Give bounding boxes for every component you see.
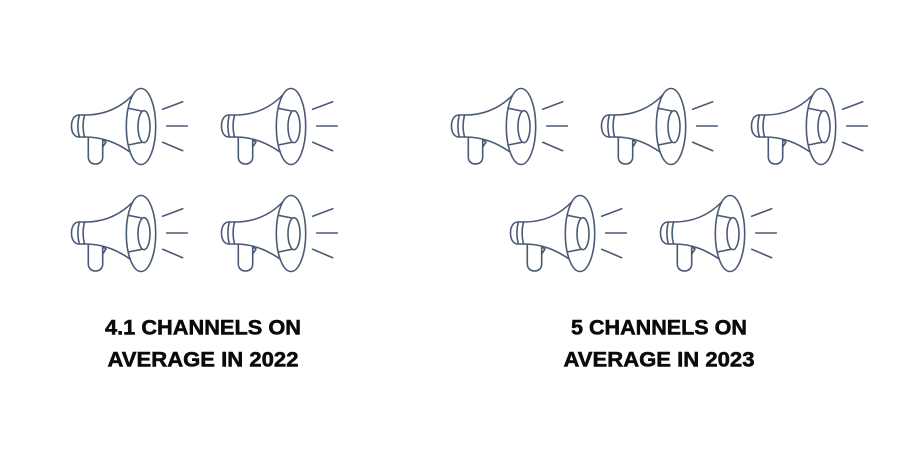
- icon: megaphone 1: [452, 88, 567, 164]
- icon: megaphone 2: [602, 88, 717, 164]
- icon: megaphone 3: [752, 88, 867, 164]
- caption: 2022: 4.1 CHANNELS ON: [105, 316, 301, 340]
- icon: megaphone 4: [510, 196, 626, 272]
- caption: 2023: 5 CHANNELS ON: [571, 316, 747, 340]
- icon: megaphone 1: [72, 88, 187, 164]
- panel: 2022 channels: [72, 88, 337, 372]
- icon: megaphone 4: [222, 196, 337, 272]
- caption: 2022: AVERAGE IN 2022: [108, 348, 299, 372]
- icon: megaphone 5: [660, 196, 776, 272]
- caption: 2023: AVERAGE IN 2023: [564, 348, 755, 372]
- icon: megaphone 2: [222, 88, 337, 164]
- panel: 2023 channels: [452, 88, 867, 372]
- icon: megaphone 3: [72, 196, 187, 272]
